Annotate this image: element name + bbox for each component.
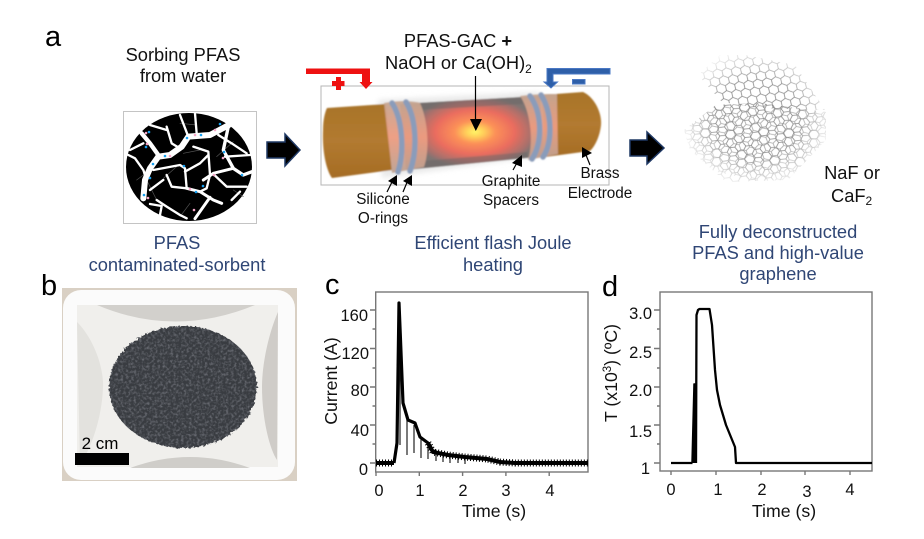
arrow: to sample centre: [470, 76, 482, 131]
chart d: temperature vs time: [601, 292, 872, 521]
red positive lead: [306, 68, 372, 90]
left brass electrode: [323, 104, 392, 178]
label: graphite spacers: Spacers: [483, 192, 539, 209]
heading: PFAS-GAC plus base: NaOH or Ca(OH): [385, 52, 525, 73]
text: sorbing PFAS from water: from water: [140, 65, 226, 86]
arrow: sorbent to reactor: [267, 134, 300, 166]
y tick labels: [340, 307, 369, 479]
label: NaF or CaF2: CaF: [831, 185, 866, 206]
caption: contaminated sorbent: contaminated-sorbent: [89, 254, 265, 275]
label: NaF or CaF2: 2: [866, 194, 873, 208]
axis title y: Current (A): [321, 337, 341, 425]
arrow: brass electrode: [582, 147, 592, 165]
heated graphite tube: [400, 96, 545, 170]
panel b: photo of sorbent in tray: [62, 288, 297, 481]
axis title y: ) (ºC): [601, 324, 621, 366]
tray inner walls: [77, 305, 278, 467]
right brass electrode: [542, 92, 601, 157]
axis title x: Time (s): [462, 501, 526, 521]
x tick labels: 3: [501, 482, 511, 500]
y tick labels: 0: [359, 461, 368, 479]
heading: PFAS-GAC plus base: PFAS-GAC +: [404, 30, 512, 51]
x tick labels: 1: [713, 481, 723, 499]
text: sorbing PFAS from water: Sorbing PFAS: [126, 44, 240, 65]
y tick labels: 80: [351, 382, 369, 400]
caption: deconstructed PFAS: PFAS and high-value: [692, 242, 864, 263]
x tick labels: 2: [757, 481, 767, 499]
tube shading: [418, 97, 528, 168]
axes frame: [370, 292, 588, 476]
caption: deconstructed PFAS: Fully deconstructed: [699, 221, 857, 242]
x tick labels: 0: [374, 482, 384, 500]
reactor frame: [321, 86, 609, 185]
y tick labels: 1: [641, 460, 650, 478]
axis title x: Time (s): [752, 501, 816, 521]
label: silicone O-rings: Silicone: [356, 191, 410, 208]
data spikes: [400, 320, 465, 464]
y tick labels: 2.0: [629, 382, 652, 400]
x tick labels: 1: [415, 482, 425, 500]
x tick labels: 3: [802, 483, 812, 501]
x tick labels: 2: [458, 482, 468, 500]
blue negative lead: [544, 68, 610, 88]
label: NaF or CaF2: NaF or: [824, 162, 880, 183]
panel b label: b: [41, 270, 57, 302]
caption: flash Joule heating: heating: [463, 254, 523, 275]
label: graphite spacers: Graphite: [482, 173, 540, 190]
caption: deconstructed PFAS: graphene: [739, 263, 817, 284]
icon: graphene sheets: [684, 55, 826, 182]
label: brass electrode: Brass: [580, 165, 620, 182]
caption: flash Joule heating: Efficient flash Joule: [414, 232, 572, 253]
panel a label: a: [45, 21, 62, 53]
x tick labels: 4: [545, 482, 555, 500]
scale label: 2 cm: [82, 434, 118, 453]
x tick labels: 0: [666, 481, 676, 499]
x tick labels: 4: [845, 481, 855, 499]
axis title y: 3: [602, 366, 614, 372]
y tick labels: [629, 305, 652, 478]
y tick labels: 1.5: [629, 423, 652, 441]
graphite spacers and rings: [384, 94, 558, 173]
panel c label: c: [325, 269, 340, 301]
x tick labels: [666, 481, 855, 501]
spike segment: [692, 384, 696, 463]
icon: contaminated sorbent: [124, 112, 256, 224]
y tick labels: 120: [341, 345, 369, 363]
chart c: current vs time: [321, 292, 588, 521]
arrow: reactor to product: [630, 132, 664, 164]
current noise detail: [376, 443, 588, 463]
temperature trace: [671, 309, 872, 463]
axis title y: T (x10: [601, 372, 621, 422]
reactor cylinder: [323, 92, 601, 178]
y tick labels: 2.5: [629, 344, 652, 362]
current trace: [394, 303, 433, 463]
arrow: graphite spacers: [512, 155, 522, 170]
arrows: O-rings: [387, 175, 412, 192]
panel d label: d: [602, 271, 618, 303]
current noise: [376, 443, 588, 463]
y tick labels: 3.0: [629, 305, 652, 323]
label: brass electrode: Electrode: [568, 185, 632, 202]
heading: PFAS-GAC plus base: 2: [525, 62, 532, 76]
axes frame: [654, 292, 872, 475]
y tick labels: 40: [351, 422, 369, 440]
scale bar: [75, 453, 129, 465]
x tick labels: [374, 482, 555, 500]
y tick labels: 160: [340, 307, 368, 325]
caption: contaminated sorbent: PFAS: [154, 232, 200, 253]
label: silicone O-rings: O-rings: [358, 210, 408, 227]
dark granular sorbent: [109, 326, 257, 448]
